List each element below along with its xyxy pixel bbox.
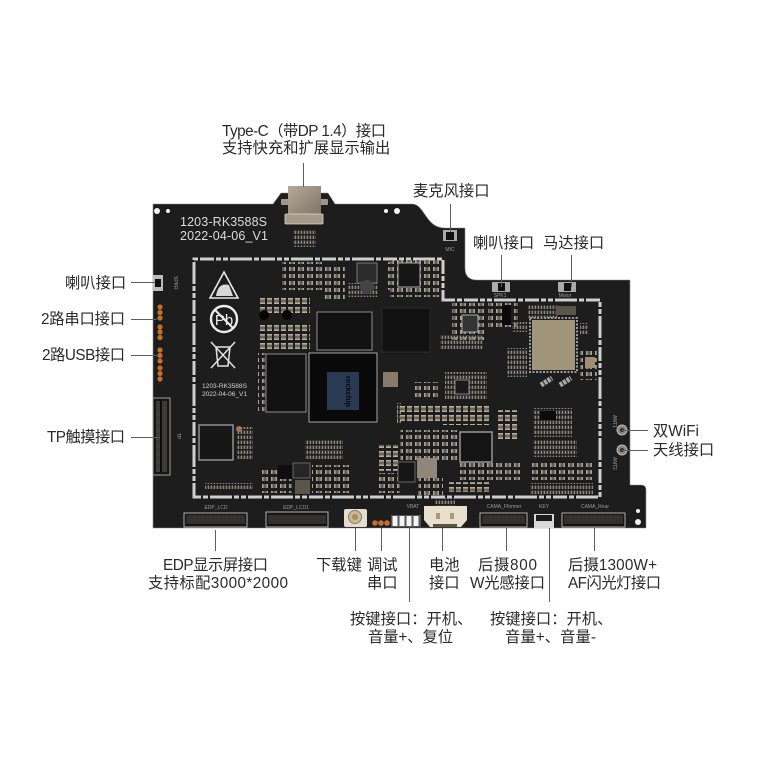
label: EDP: EDP显示屏接口	[163, 557, 268, 574]
camera connectors	[480, 504, 625, 527]
board	[153, 186, 646, 528]
label: wifi: 天线接口	[653, 442, 714, 459]
label: battery: 接口	[429, 575, 460, 592]
SoC side pads	[258, 353, 266, 413]
camera connectors: CAMA_Fformer	[487, 504, 522, 510]
label: EDP	[148, 557, 288, 592]
label: Type-C	[222, 123, 390, 157]
key connector	[534, 504, 554, 528]
label: wifi: 双WiFi	[653, 423, 699, 440]
SoC RK3588S: rockchip	[344, 376, 353, 408]
board title silkscreen	[180, 215, 268, 243]
silkscreen frame	[194, 259, 600, 497]
board title silkscreen: 2022-04-06_V1	[180, 229, 268, 243]
label: debug uart: 调试	[367, 557, 398, 574]
battery connector	[424, 498, 467, 527]
key connector: KEY	[539, 504, 550, 510]
mic connector: MIC	[445, 247, 455, 253]
label: keys 1	[350, 611, 472, 646]
antenna connectors	[611, 415, 627, 470]
antenna connectors: ANT1	[611, 415, 617, 428]
label: Type-C: Type-C（带DP 1.4）接口	[222, 123, 386, 140]
label: touch: TP触摸接口	[47, 429, 125, 446]
label: rear camera 1300: 后摄1300W+	[568, 557, 657, 574]
label: download key: 下载键	[316, 557, 362, 574]
mic connector	[443, 230, 457, 253]
EDP connectors: EDP_LCD1	[283, 505, 309, 511]
label: keys 1: 按键接口：开机、	[350, 611, 472, 628]
board title silkscreen: 1203-RK3588S	[180, 215, 267, 229]
icon: ESD warning	[210, 272, 238, 298]
keys connector	[391, 504, 421, 527]
small silk text: 1203-RK3588S	[202, 383, 248, 390]
label: debug uart: 串口	[367, 575, 398, 592]
antenna connectors: ANT2	[611, 457, 617, 470]
label: battery: 电池	[429, 557, 460, 574]
SoC RK3588S	[309, 353, 377, 422]
icon: lead free	[211, 306, 237, 332]
camera connectors: CAMA_Rear	[581, 504, 609, 510]
label: keys 2: 音量+、音量-	[505, 629, 596, 646]
speaker connector left: SPKR	[172, 276, 178, 290]
label: rear camera 800	[470, 557, 545, 592]
small silk text	[202, 383, 248, 398]
EDP connectors: EDP_LCD	[204, 505, 228, 511]
label: keys 1: 音量+、复位	[368, 629, 453, 646]
label: wifi	[653, 423, 714, 459]
TP connector	[153, 398, 181, 475]
label: mic: 麦克风接口	[413, 183, 490, 200]
keys connector: VBAT	[407, 504, 419, 510]
label: motor: 马达接口	[543, 235, 604, 252]
TP connector: TP	[175, 433, 181, 440]
label: keys 2	[490, 611, 612, 646]
wifi module	[530, 318, 577, 372]
speaker connector top: SPK1	[494, 293, 507, 299]
motor connector: Motor	[559, 293, 572, 299]
mounting holes	[154, 208, 641, 525]
type-c connector	[281, 186, 328, 247]
small silk text: 2022-04-06_V1	[202, 391, 247, 398]
icon: WEEE bin	[211, 342, 235, 368]
orange header pads	[157, 304, 390, 526]
label: EDP: 支持标配3000*2000	[148, 575, 288, 592]
speaker connector left	[153, 275, 178, 291]
leader lines	[131, 163, 648, 602]
label: battery	[429, 557, 460, 592]
label: UART: 2路串口接口	[41, 311, 125, 328]
label: rear camera 1300: AF闪光灯接口	[568, 575, 661, 592]
label: Type-C: 支持快充和扩展显示输出	[222, 140, 390, 157]
icon: lead free: Pb	[215, 312, 233, 329]
download button	[344, 509, 367, 527]
label: USB: 2路USB接口	[42, 347, 125, 364]
speaker connector top	[492, 282, 510, 299]
label: rear camera 1300	[568, 557, 661, 592]
label: keys 2: 按键接口：开机、	[490, 611, 612, 628]
label: speaker left: 喇叭接口	[65, 275, 126, 292]
label: rear camera 800: 后摄800	[478, 557, 537, 574]
board outline	[153, 193, 646, 528]
motor connector	[558, 282, 576, 299]
label: debug uart	[367, 557, 398, 592]
EDP connectors	[184, 505, 328, 527]
label: speaker top: 喇叭接口	[473, 235, 534, 252]
label: rear camera 800: W光感接口	[470, 575, 545, 592]
surface mount components	[199, 257, 597, 495]
memory chips	[266, 308, 430, 412]
